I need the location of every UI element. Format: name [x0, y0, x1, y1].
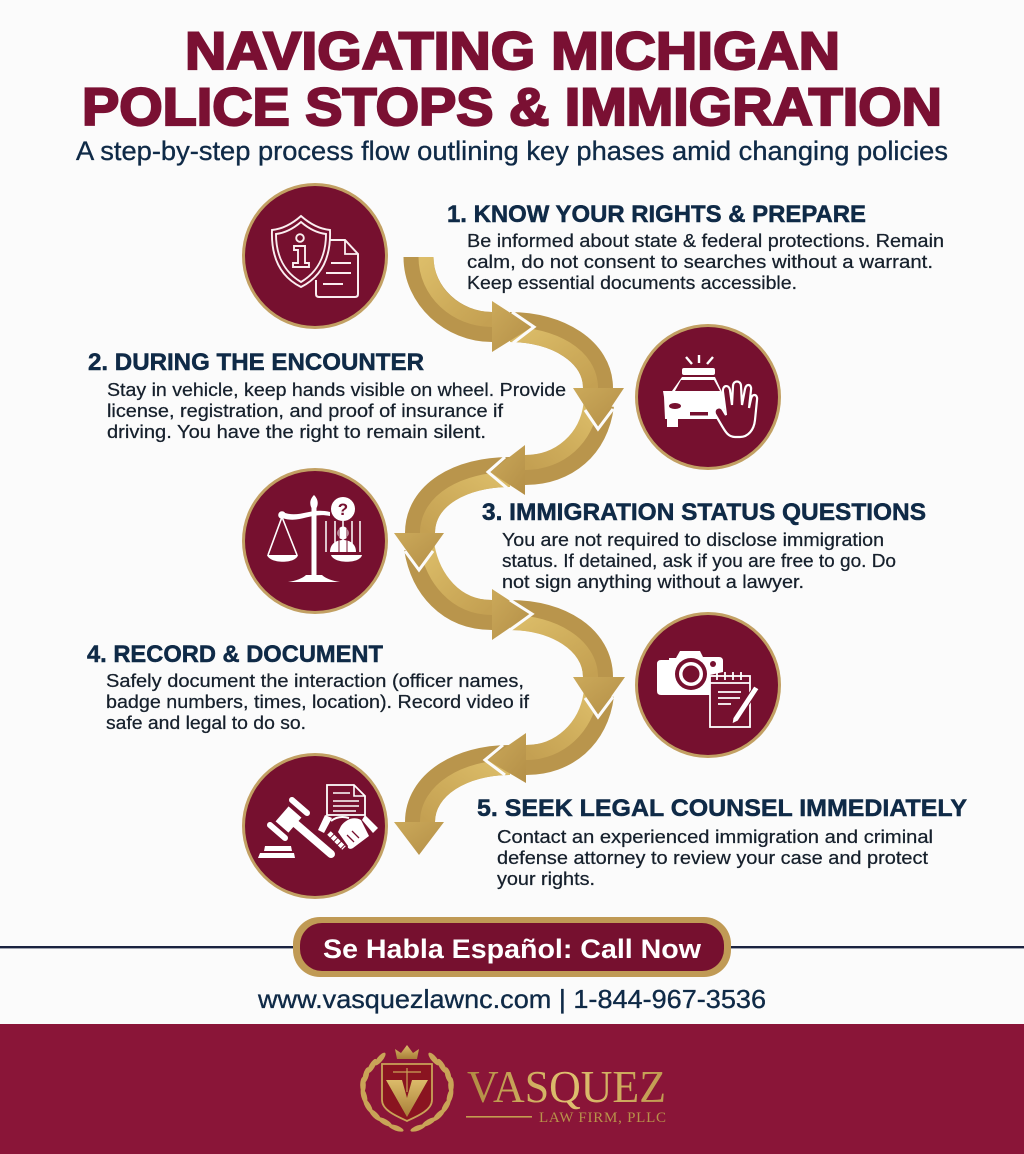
title: POLICE STOPS & IMMIGRATION	[82, 78, 942, 137]
step 2 text	[88, 349, 566, 442]
step 2 body: license, registration, and proof of insurance if	[107, 400, 504, 421]
step 4 text	[87, 641, 530, 733]
icon: camera and notepad	[635, 612, 781, 758]
contact line: www.vasquezlawnc.com | 1-844-967-3536	[257, 984, 766, 1014]
step 4 heading: 4. RECORD & DOCUMENT	[87, 641, 383, 668]
logo: firm name: LAW FIRM, PLLC	[539, 1110, 666, 1126]
step 1 body: Be informed about state & federal protections. Remain	[467, 230, 944, 251]
process flow arrows	[394, 257, 625, 855]
step 2 body: Stay in vehicle, keep hands visible on wheel. Provide	[107, 379, 566, 400]
step 1 text	[447, 201, 944, 293]
step 5 body: Contact an experienced immigration and criminal	[497, 826, 933, 847]
step 5 body: defense attorney to review your case and protect	[497, 847, 928, 868]
step 2 body	[107, 379, 566, 442]
title: NAVIGATING MICHIGAN	[185, 22, 840, 81]
logo: crest	[359, 1045, 455, 1133]
icon: police car and raised hand	[635, 324, 781, 470]
step 3 text	[482, 499, 926, 592]
icon: scales of justice with question mark	[242, 468, 388, 614]
arrow: curve to scales icon	[394, 472, 510, 570]
arrow: curve toward camera icon	[510, 615, 625, 717]
step 5 body	[497, 826, 933, 889]
step 3 body: status. If detained, ask if you are free to go. Do	[502, 550, 896, 571]
arrow: step 1 curve	[418, 257, 534, 352]
step 5 body: your rights.	[497, 868, 595, 889]
arrow: curve toward police stop icon	[510, 327, 624, 429]
step 3 body	[502, 529, 896, 592]
step 3 heading: 3. IMMIGRATION STATUS QUESTIONS	[482, 499, 926, 526]
arrow: curve back left lower	[485, 694, 599, 783]
step 5 text	[477, 795, 967, 889]
step 2 heading: 2. DURING THE ENCOUNTER	[88, 349, 424, 376]
step 3 body: not sign anything without a lawyer.	[502, 571, 804, 592]
arrow: curve right from scales icon	[419, 546, 532, 640]
step 2 body: driving. You have the right to remain silent.	[107, 421, 486, 442]
icon: scales of justice with question mark: ?	[338, 500, 348, 519]
footer band	[0, 1024, 1024, 1154]
step 1 body: calm, do not consent to searches without a warrant.	[467, 251, 933, 272]
arrow: curve back left	[488, 404, 599, 495]
step 1 body	[467, 230, 944, 293]
icon: gavel and handshake	[242, 753, 388, 899]
step 4 body: badge numbers, times, location). Record video if	[106, 691, 530, 712]
subtitle: A step-by-step process flow outlining key phases amid changing policies	[76, 136, 948, 166]
step 5 heading: 5. SEEK LEGAL COUNSEL IMMEDIATELY	[477, 795, 967, 822]
arrow: final curve to legal icon	[394, 760, 510, 855]
title	[82, 22, 942, 137]
call to action button: Se Habla Español: Call Now	[323, 934, 702, 964]
step 1 heading: 1. KNOW YOUR RIGHTS & PREPARE	[447, 201, 866, 228]
logo: firm name: VASQUEZ	[467, 1061, 666, 1112]
step 4 body: Safely document the interaction (officer names,	[106, 670, 524, 691]
call to action button	[293, 917, 731, 977]
step 1 body: Keep essential documents accessible.	[467, 272, 797, 293]
icon: shield and document	[242, 183, 388, 329]
step 4 body	[106, 670, 530, 733]
step 3 body: You are not required to disclose immigration	[502, 529, 884, 550]
step 4 body: safe and legal to do so.	[106, 712, 306, 733]
